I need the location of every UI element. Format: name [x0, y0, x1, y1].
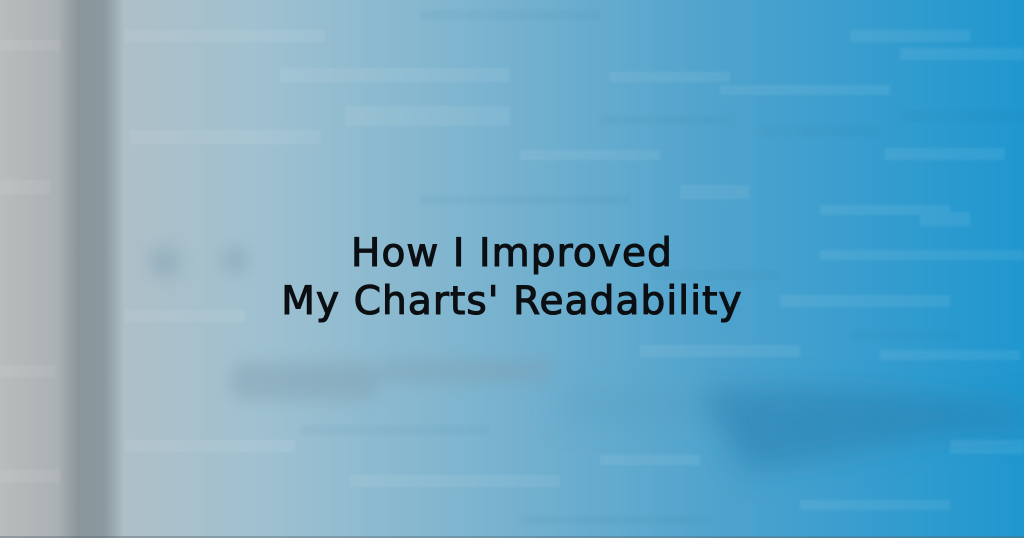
dark vertical band	[58, 0, 124, 538]
title: How I Improved	[351, 231, 673, 276]
dark blue blur lower right	[560, 388, 1024, 470]
title	[281, 231, 743, 324]
title: My Charts' Readability	[281, 279, 743, 324]
blurred shapes	[149, 246, 550, 400]
